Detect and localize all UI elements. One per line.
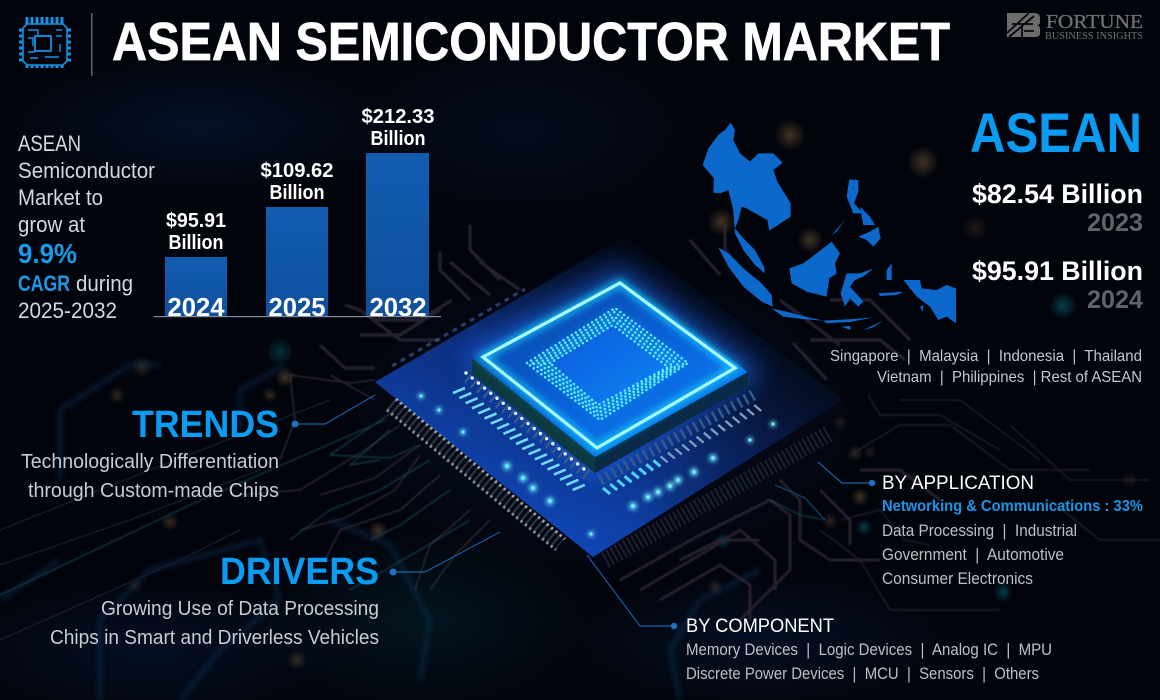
trends connector [292,395,375,428]
by application [882,473,1143,588]
market size panel: $82.54 Billion [972,179,1143,209]
CAGR text block: during [76,271,133,296]
trends: through Custom-made Chips [28,480,279,502]
market size panel: 2023 [1087,209,1143,237]
bar 2032: 2032 [370,292,426,322]
component connector [587,555,677,629]
trends [21,404,279,502]
bar 2024: $95.91 [166,210,226,232]
market size panel [970,101,1143,314]
bar 2032: Billion [370,128,426,150]
icon: chip [19,17,71,68]
CAGR text block: Market to [18,185,103,210]
CAGR text block: ASEAN [18,131,81,156]
CAGR text block: CAGR [18,271,70,296]
drivers: Growing Use of Data Processing [101,598,379,620]
neon frame [483,283,735,448]
logo: FORTUNE [1046,11,1143,33]
CAGR text block: grow at [18,212,85,237]
bar chart [154,106,441,322]
title: ASEAN SEMICONDUCTOR MARKET [112,12,950,72]
by application: BY APPLICATION [882,473,1034,494]
by component: Discrete Power Devices | MCU | Sensors | Others [686,665,1039,683]
bar 2025: Billion [270,182,324,204]
by application: Networking & Communications : 33% [882,498,1143,515]
CAGR text block [18,131,155,323]
bar 2024 [165,210,227,322]
header divider [91,13,92,76]
chip substrate [375,236,843,567]
drivers: DRIVERS [220,551,379,593]
glow under package [460,265,765,480]
trends: Technologically Differentiation [21,451,279,473]
bar 2032 [362,106,434,322]
application connector [818,462,875,486]
bar 2025 [260,160,334,322]
by component: BY COMPONENT [686,616,834,637]
market size panel: 2024 [1087,286,1143,314]
by component: Memory Devices | Logic Devices | Analog IC | MPU [686,641,1052,659]
by application: Government | Automotive [882,546,1064,564]
drivers: Chips in Smart and Driverless Vehicles [50,627,379,649]
bar 2032: $212.33 [362,106,434,128]
drivers [50,551,379,649]
countries list: Vietnam | Philippines | Rest of ASEAN [877,369,1142,386]
by component [686,616,1052,683]
bar 2025: $109.62 [260,160,334,182]
logo: BUSINESS INSIGHTS [1045,31,1143,42]
countries list: Singapore | Malaysia | Indonesia | Thailand [830,348,1142,365]
LED lights [418,393,776,537]
CAGR text block: Semiconductor [18,158,155,183]
package body [472,280,748,473]
map: Southeast Asia [703,123,956,330]
package leads [453,373,761,494]
logo [1007,11,1143,42]
CAGR text block: 9.9% [18,238,77,269]
trends: TRENDS [132,404,279,446]
bar 2024: Billion [168,232,224,254]
by application: Data Processing | Industrial [882,522,1077,540]
by application: Consumer Electronics [882,570,1033,588]
market size panel: $95.91 Billion [972,256,1143,286]
countries list [830,348,1142,386]
drivers connector [390,532,500,576]
substrate pins [387,399,830,560]
central chip [375,236,843,567]
CAGR text block: 2025-2032 [18,298,117,323]
bar 2025: 2025 [268,292,326,322]
bar 2024: 2024 [168,292,225,322]
die dot matrix [527,308,688,420]
circuit traces [0,225,1160,700]
